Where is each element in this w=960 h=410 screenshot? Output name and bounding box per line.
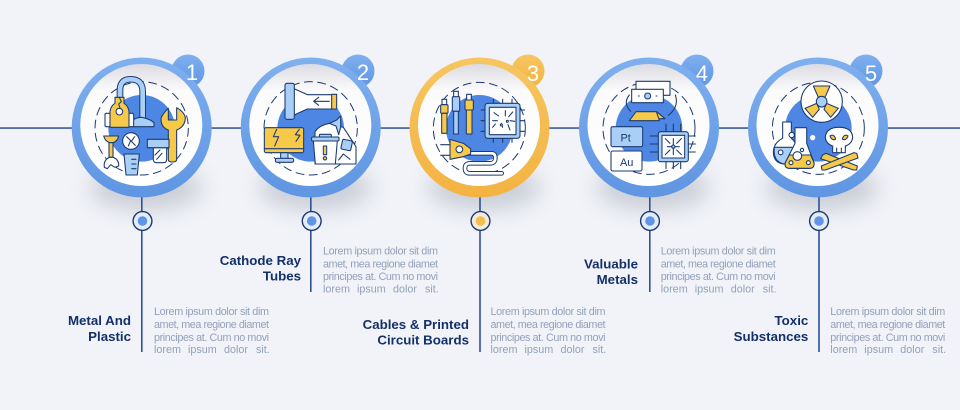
heading: Toxic Substances: Toxic <box>775 313 808 328</box>
icon: cables and circuit board <box>433 82 525 174</box>
heading: Cables and Printed Circuit Boards: Cables & Printed <box>363 317 469 332</box>
connector node 4 <box>641 212 659 230</box>
text block 2: lorem <box>323 284 350 296</box>
connector node 3 <box>471 212 490 230</box>
text block 5: principes at. Cum no movi <box>830 332 945 344</box>
connector node 5 <box>810 212 828 230</box>
text block 5: lorem <box>830 344 857 356</box>
timeline horizontal line <box>0 127 960 129</box>
text block 2: Lorem ipsum dolor sit dim <box>323 246 438 258</box>
text block 5: dolor <box>900 344 925 356</box>
text block 1: ipsum <box>188 344 217 356</box>
text block 4: ipsum <box>695 284 724 296</box>
step 4: circle and icon <box>579 54 719 292</box>
heading: Metal And Plastic: Metal And <box>68 313 131 328</box>
text block 3: principes at. Cum no movi <box>490 332 606 344</box>
icon: tools <box>95 79 188 175</box>
heading: Valuable Metals: Valuable <box>584 256 638 272</box>
step 5: circle and icon <box>748 54 888 352</box>
connector node 1 <box>133 212 152 230</box>
step 5: circle and icon: 5 <box>865 61 877 86</box>
text block 3: dolor <box>560 344 585 356</box>
step 3: circle and icon: 3 <box>527 61 539 86</box>
text block 5: ipsum <box>864 344 893 356</box>
step 3: circle and icon <box>410 54 550 352</box>
heading: Toxic Substances: Substances <box>734 329 808 344</box>
text block 5: amet, mea regione diamet <box>830 319 945 331</box>
text block 3: ipsum <box>524 344 553 356</box>
step 1: circle and icon <box>72 54 212 352</box>
icon: toxic substances <box>772 81 864 174</box>
heading: Cathode Ray Tubes: Tubes <box>263 268 301 284</box>
icon: valuable metals: Au <box>620 157 633 169</box>
text block 2: ipsum <box>357 284 386 296</box>
step 1: circle and icon: 1 <box>186 60 198 85</box>
text block 3: Lorem ipsum dolor sit dim <box>490 306 606 318</box>
heading: Valuable Metals: Metals <box>597 272 638 287</box>
text block 1: Lorem ipsum dolor sit dim <box>154 306 269 318</box>
icon: cathode ray tube and broken monitor <box>264 82 357 175</box>
text block 5: Lorem ipsum dolor sit dim <box>830 306 945 318</box>
text block 4: sit. <box>763 284 776 296</box>
text block 3: sit. <box>592 344 606 356</box>
step 4: circle and icon: 4 <box>696 61 708 86</box>
text block 2: principes at. Cum no movi <box>323 271 438 283</box>
text block 1: dolor <box>224 344 248 356</box>
text block 1: lorem <box>154 344 181 356</box>
text block 5: sit. <box>932 344 946 356</box>
heading: Cables and Printed Circuit Boards: Circuit Boards <box>377 333 469 348</box>
text block 1: principes at. Cum no movi <box>154 332 269 344</box>
text block 4: amet, mea regione diamet <box>661 258 776 270</box>
text block 4: dolor <box>731 284 755 296</box>
text block 1: sit. <box>256 344 270 356</box>
text block 3: lorem <box>490 344 518 356</box>
text block 4: principes at. Cum no movi <box>661 271 776 283</box>
text block 2: amet, mea regione diamet <box>323 258 438 270</box>
step 2: circle and icon <box>241 54 381 292</box>
step 2: circle and icon: 2 <box>357 60 369 85</box>
heading: Cathode Ray Tubes: Cathode Ray <box>220 253 302 268</box>
icon: valuable metals: Pt <box>620 132 631 144</box>
text block 2: dolor <box>393 284 417 296</box>
text block 4: lorem <box>661 284 688 296</box>
connector node 2 <box>302 212 321 230</box>
text block 4: Lorem ipsum dolor sit dim <box>661 246 776 258</box>
icon: valuable metals <box>603 81 695 174</box>
text block 3: amet, mea regione diamet <box>490 319 606 331</box>
text block 2: sit. <box>425 284 439 296</box>
text block 1: amet, mea regione diamet <box>154 319 269 331</box>
heading: Metal And Plastic: Plastic <box>88 329 131 344</box>
